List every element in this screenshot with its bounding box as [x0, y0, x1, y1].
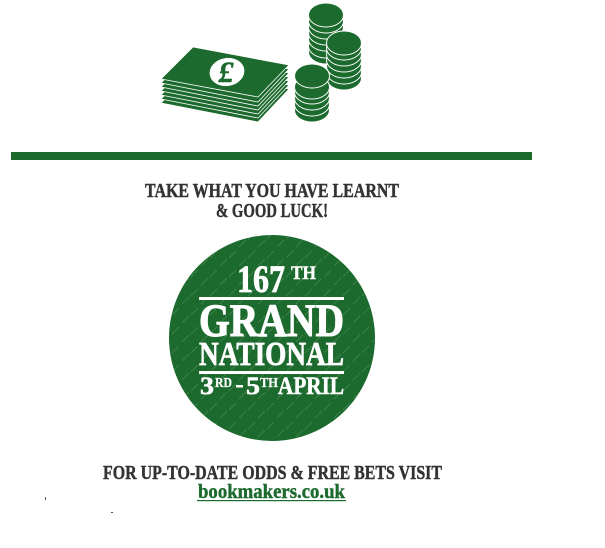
- icon: stack of banknotes: [161, 47, 289, 122]
- icon: stack of banknotes: £: [218, 56, 234, 89]
- badge text: RD: [215, 376, 232, 391]
- badge text: NATIONAL: [199, 336, 344, 373]
- badge text: TH: [291, 263, 316, 284]
- badge: 167th Grand National: [169, 235, 375, 441]
- stray specks: [45, 497, 113, 513]
- icon: coin stack front: [294, 64, 330, 122]
- icon: coin stack right: [326, 31, 362, 90]
- badge text: 167: [237, 258, 285, 301]
- badge text: GRAND: [199, 295, 344, 347]
- badge text: TH: [260, 376, 278, 391]
- badge text: 3: [200, 373, 214, 400]
- link: bookmakers.co.uk: bookmakers.co.uk: [198, 482, 345, 503]
- heading: take what you have learnt: TAKE WHAT YOU HAVE LEARNT: [145, 181, 399, 202]
- badge text: APRIL: [278, 373, 344, 400]
- divider bar: [11, 152, 532, 160]
- badge text: 5: [246, 373, 260, 400]
- footer call to action: FOR UP-TO-DATE ODDS & FREE BETS VISIT: [103, 463, 442, 484]
- heading: take what you have learnt: [145, 181, 399, 222]
- icon: coin stack back: [308, 3, 344, 64]
- heading: take what you have learnt: & GOOD LUCK!: [216, 201, 328, 222]
- badge text: [199, 258, 344, 400]
